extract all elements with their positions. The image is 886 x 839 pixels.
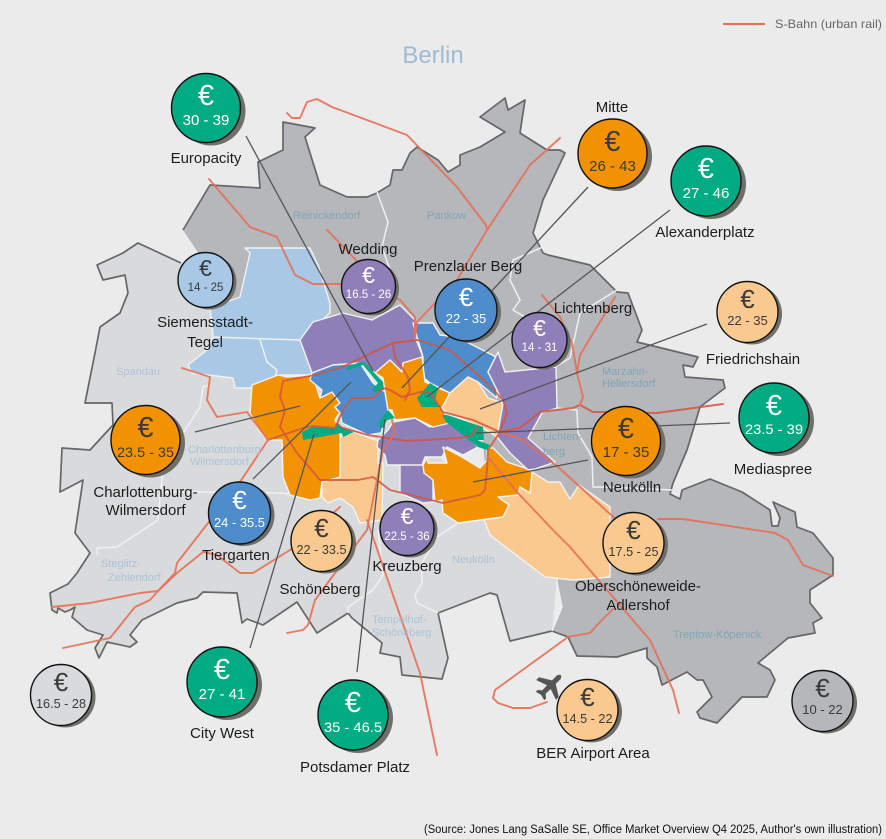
region: Oberschoeneweide-Adlershof bbox=[483, 472, 610, 580]
label: Siemensstadt-Tegel: Tegel bbox=[187, 334, 223, 351]
region: Tiergarten bbox=[310, 363, 388, 435]
marker: Neukoelln bbox=[592, 406, 666, 478]
green area: City West bbox=[302, 422, 354, 440]
label: Siemensstadt-Tegel: Siemensstadt- bbox=[157, 314, 253, 331]
marker: Schoeneberg: 22 - 33.5 bbox=[296, 542, 346, 557]
title: Berlin bbox=[402, 42, 464, 69]
marker: BER Airport Area bbox=[557, 680, 622, 742]
marker: Charlottenburg-Wilmersdorf: € bbox=[137, 412, 154, 444]
marker: Tiergarten: 24 - 35.5 bbox=[214, 515, 265, 530]
region: western and southern districts bbox=[50, 243, 557, 679]
marker: Mediaspree: 23.5 - 39 bbox=[745, 421, 803, 437]
label: Potsdamer Platz: Potsdamer Platz bbox=[300, 759, 410, 776]
district name labels: Schöneberg bbox=[372, 627, 431, 639]
marker: Siemensstadt-Tegel: 14 - 25 bbox=[188, 282, 223, 294]
label: Neukoelln: Neukölln bbox=[603, 479, 661, 496]
district name labels: Lichten- bbox=[543, 431, 582, 443]
label: City West: City West bbox=[190, 725, 255, 742]
marker: Charlottenburg-Wilmersdorf: 23.5 - 35 bbox=[117, 444, 174, 460]
district name labels: Wilmersdorf bbox=[190, 456, 250, 468]
marker: City West: € bbox=[214, 654, 230, 686]
district name labels: Zehlendorf bbox=[108, 572, 162, 584]
district name labels: Pankow bbox=[427, 210, 466, 222]
marker: Tiergarten: € bbox=[232, 485, 247, 515]
label: Schoeneberg: Schöneberg bbox=[280, 581, 360, 598]
marker: Mitte: € bbox=[604, 126, 621, 158]
marker: Potsdamer Platz: € bbox=[345, 687, 361, 719]
label: Tiergarten: Tiergarten bbox=[202, 547, 270, 564]
marker: BER Airport Area: 14.5 - 22 bbox=[562, 711, 612, 726]
green area: Mediaspree bbox=[442, 415, 490, 450]
inner boundary in Siemensstadt-Tegel bbox=[210, 308, 300, 340]
marker: Tiergarten bbox=[208, 482, 274, 546]
marker: Wedding bbox=[342, 260, 399, 316]
leader lines bbox=[195, 136, 730, 672]
marker: Mitte bbox=[578, 119, 652, 191]
label: Mediaspree: Mediaspree bbox=[734, 461, 812, 478]
marker: light grey legend rent: € bbox=[54, 667, 69, 697]
district name labels: Spandau bbox=[116, 366, 160, 378]
region: Friedrichshain bbox=[442, 377, 503, 437]
label: Mitte: Mitte bbox=[596, 99, 628, 116]
marker: Mitte: 26 - 43 bbox=[589, 158, 636, 175]
region: Kreuzberg bbox=[377, 418, 478, 503]
district name labels: Charlottenburg- bbox=[188, 444, 265, 456]
label: Prenzlauer Berg: Prenzlauer Berg bbox=[414, 258, 522, 275]
marker: Neukoelln: € bbox=[618, 413, 634, 445]
marker: Friedrichshain bbox=[717, 282, 782, 344]
marker: Potsdamer Platz: 35 - 46.5 bbox=[324, 719, 382, 735]
marker: Siemensstadt-Tegel: € bbox=[199, 255, 212, 281]
marker: Lichtenberg: 14 - 31 bbox=[522, 342, 557, 354]
label: Oberschoeneweide-Adlershof: Oberschöneweide- bbox=[575, 578, 701, 595]
district name labels: Treptow-Köpenick bbox=[673, 629, 762, 641]
marker: Mediaspree: € bbox=[766, 390, 782, 422]
label: Lichtenberg: Lichtenberg bbox=[554, 300, 632, 317]
label: Charlottenburg-Wilmersdorf: Charlottenburg- bbox=[93, 484, 198, 501]
marker: Alexanderplatz: € bbox=[698, 153, 714, 185]
label: Friedrichshain: Friedrichshain bbox=[706, 351, 800, 368]
marker: Potsdamer Platz bbox=[318, 680, 393, 753]
green area: Alexanderplatz bbox=[417, 383, 440, 407]
district name labels: Hellersdorf bbox=[602, 378, 656, 390]
marker: City West bbox=[187, 647, 262, 720]
marker: Oberschoeneweide-Adlershof: 17.5 - 25 bbox=[608, 544, 658, 559]
marker: Prenzlauer Berg: € bbox=[459, 282, 474, 312]
district name labels: Reinickendorf bbox=[293, 210, 361, 222]
marker: BER Airport Area: € bbox=[580, 682, 595, 712]
marker: Europacity bbox=[172, 74, 246, 146]
label: Charlottenburg-Wilmersdorf: Wilmersdorf bbox=[105, 502, 186, 519]
marker: Schoeneberg bbox=[291, 510, 356, 574]
outer boundary line bbox=[183, 98, 833, 723]
icon: airplane bbox=[530, 665, 571, 706]
marker: Kreuzberg: € bbox=[401, 503, 414, 529]
marker: Lichtenberg bbox=[512, 312, 570, 370]
region: Prenzlauer Berg bbox=[413, 323, 498, 398]
marker: Lichtenberg: € bbox=[533, 315, 546, 341]
marker: dark grey legend rent: € bbox=[815, 673, 830, 703]
region: Mitte bbox=[375, 357, 450, 427]
region: Siemensstadt-Tegel bbox=[188, 248, 330, 388]
marker: Friedrichshain: € bbox=[740, 284, 755, 314]
region: Lichtenberg bbox=[488, 352, 557, 470]
legend: S-Bahn: S-Bahn (urban rail) bbox=[775, 17, 882, 31]
label: Wedding: Wedding bbox=[339, 241, 397, 258]
marker: Wedding: € bbox=[362, 262, 375, 288]
marker: Charlottenburg-Wilmersdorf bbox=[111, 406, 185, 478]
marker: Kreuzberg: 22.5 - 36 bbox=[384, 531, 430, 543]
marker: Schoeneberg: € bbox=[314, 513, 329, 543]
marker: Kreuzberg bbox=[380, 502, 438, 558]
outer boundary line west bbox=[50, 243, 552, 679]
source note: (Source: Jones Lang SaSalle SE, Office Market Overview Q4 2025, Author's own illustration) bbox=[424, 824, 882, 836]
marker: Oberschoeneweide-Adlershof bbox=[603, 512, 668, 576]
marker: light grey legend rent: 16.5 - 28 bbox=[36, 696, 86, 711]
label: Oberschoeneweide-Adlershof: Adlershof bbox=[606, 597, 671, 614]
district name labels: Steglitz- bbox=[101, 558, 141, 570]
marker: Wedding: 16.5 - 26 bbox=[346, 289, 391, 301]
marker: light grey legend rent bbox=[30, 664, 96, 728]
region: northern and eastern districts bbox=[183, 98, 833, 723]
district name labels: Tempelhof- bbox=[372, 614, 427, 626]
inner boundary south of Tegel bbox=[260, 340, 277, 377]
map of Berlin bbox=[50, 98, 833, 723]
marker: City West: 27 - 41 bbox=[199, 686, 245, 703]
marker: Siemensstadt-Tegel bbox=[178, 252, 236, 310]
green area: Europacity bbox=[347, 362, 384, 392]
label: Alexanderplatz: Alexanderplatz bbox=[655, 224, 755, 241]
district name labels: berg bbox=[543, 446, 565, 458]
green area: Potsdamer Platz bbox=[379, 410, 395, 428]
S-Bahn rail network bbox=[52, 99, 833, 755]
marker: Prenzlauer Berg: 22 - 35 bbox=[446, 311, 486, 326]
district name labels: Neukölln bbox=[452, 554, 495, 566]
region: Wedding bbox=[300, 305, 423, 373]
district boundary lines bbox=[97, 192, 672, 631]
label: BER Airport Area: BER Airport Area bbox=[536, 745, 650, 762]
district name labels bbox=[101, 210, 762, 641]
marker: Mediaspree bbox=[739, 383, 814, 456]
marker: dark grey legend rent bbox=[792, 670, 857, 734]
label: Kreuzberg: Kreuzberg bbox=[372, 558, 442, 575]
marker: Europacity: € bbox=[198, 80, 214, 112]
marker: Prenzlauer Berg bbox=[435, 279, 501, 343]
marker: Neukoelln: 17 - 35 bbox=[603, 444, 649, 461]
label: Europacity: Europacity bbox=[171, 150, 242, 167]
marker: Alexanderplatz: 27 - 46 bbox=[683, 185, 729, 202]
region: Charlottenburg-Wilmersdorf bbox=[250, 373, 340, 500]
marker: Oberschoeneweide-Adlershof: € bbox=[626, 515, 641, 545]
marker: dark grey legend rent: 10 - 22 bbox=[802, 702, 843, 717]
district name labels: Marzahn- bbox=[602, 366, 649, 378]
region: Neukoelln bbox=[423, 447, 532, 523]
region: Schoeneberg bbox=[322, 432, 383, 523]
marker: Friedrichshain: 22 - 35 bbox=[727, 313, 768, 328]
marker: Alexanderplatz bbox=[671, 146, 746, 219]
marker: Europacity: 30 - 39 bbox=[183, 112, 229, 129]
